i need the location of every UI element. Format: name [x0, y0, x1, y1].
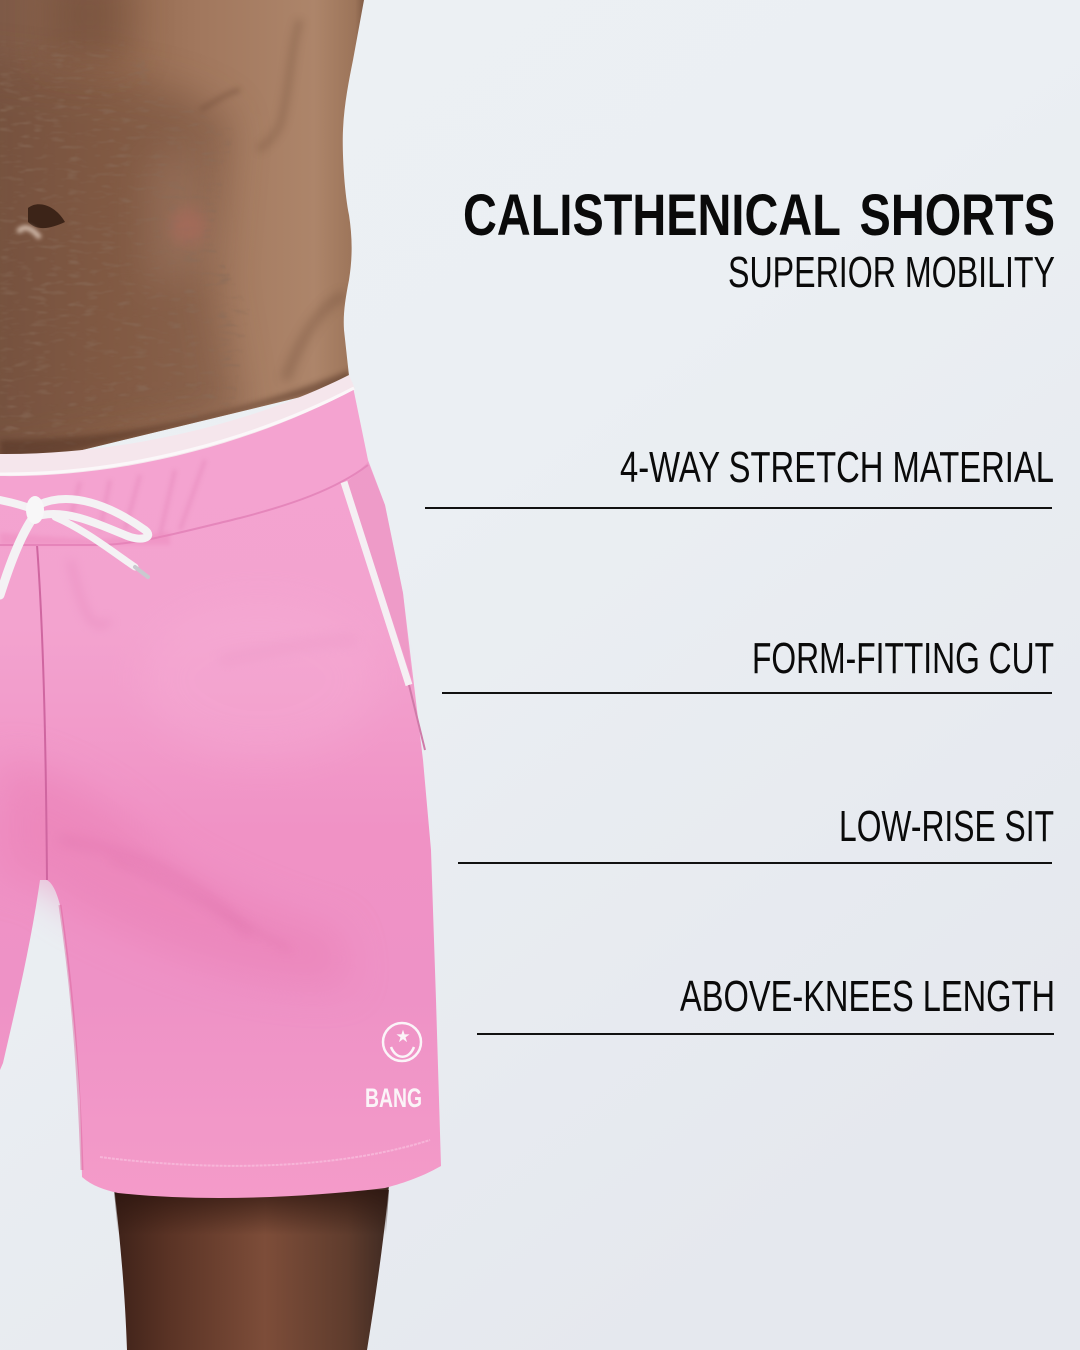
hair shading [0, 60, 240, 470]
side piping [344, 482, 409, 685]
highlight [140, 600, 380, 760]
waistband gathers [70, 460, 205, 535]
shorts body [0, 382, 441, 1198]
knot [26, 496, 44, 524]
navel [28, 204, 65, 228]
broad shading [0, 760, 350, 985]
brand text: BANG [365, 1083, 422, 1113]
star: ★ [395, 1027, 411, 1046]
smiley icon [383, 1023, 421, 1061]
torso [0, 0, 370, 480]
waist shadow [0, 369, 349, 454]
waistband trim [0, 375, 355, 476]
fabric folds [60, 840, 250, 935]
fly seam [37, 545, 47, 880]
side seam [60, 905, 82, 1170]
side panel [347, 462, 412, 680]
photo: model wearing pink shorts [0, 0, 441, 1350]
hem stitching [100, 1140, 430, 1166]
logo [365, 1023, 422, 1113]
waistband seam [0, 465, 368, 545]
leg [114, 1185, 389, 1350]
abdominal creases [200, 90, 240, 110]
drawstring [0, 496, 148, 595]
hair texture [0, 55, 232, 434]
skin redness [171, 210, 203, 242]
shorts [0, 375, 441, 1198]
